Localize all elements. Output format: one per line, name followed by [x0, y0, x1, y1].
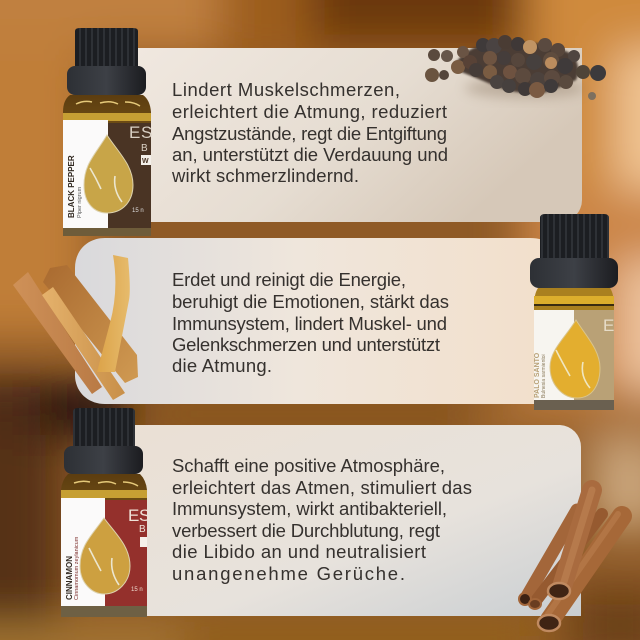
label drop — [80, 518, 130, 594]
stick ends — [519, 583, 570, 631]
label brand: E — [129, 123, 140, 142]
bottle: black pepper: S — [141, 123, 152, 142]
bottle collar — [530, 258, 618, 288]
panel: black pepper — [100, 48, 582, 222]
bottle cap — [540, 214, 609, 262]
text: black pepper benefits: erleichtert die Atmung, reduziert — [172, 101, 447, 122]
bottle: cinnamon — [61, 408, 150, 617]
label brand: E — [603, 316, 614, 335]
text: black pepper benefits: Lindert Muskelschmerzen, — [172, 79, 400, 100]
bottle: black pepper — [63, 28, 152, 236]
bottle: black pepper: Piper nigrum — [77, 186, 83, 218]
bottle: cinnamon: 15 n — [131, 587, 143, 593]
label drop — [550, 320, 600, 398]
bottle cap — [75, 28, 138, 70]
bottle: black pepper: B — [141, 143, 148, 154]
cinnamon stick — [561, 490, 592, 590]
bottle label — [61, 498, 105, 606]
text: black pepper benefits — [171, 79, 448, 186]
wood stick — [13, 272, 102, 394]
text: palo santo benefits: die Atmung. — [172, 355, 272, 376]
bottle: cinnamon: S — [139, 506, 150, 525]
text: cinnamon benefits: die Libido an und neutralisiert — [172, 541, 426, 562]
text: palo santo benefits: beruhigt die Emotionen, stärkt das — [172, 291, 449, 312]
bottle cap — [73, 408, 135, 450]
bottle label — [63, 120, 108, 228]
cinnamon stick — [526, 510, 577, 598]
text: palo santo benefits — [172, 269, 449, 376]
text: cinnamon benefits: Schafft eine positive Atmosphäre, — [172, 455, 445, 476]
icon: cinnamon sticks — [519, 490, 622, 631]
bottle: cinnamon: B — [139, 524, 146, 535]
text: cinnamon benefits: verbessert die Durchblutung, regt — [172, 520, 440, 541]
text: black pepper benefits: Angstzustände, regt die Entgiftung — [172, 123, 447, 144]
icon: black peppercorns — [425, 35, 606, 100]
bottle: black pepper: W — [142, 158, 149, 165]
wood stick — [97, 255, 130, 372]
label brand: E — [128, 506, 139, 525]
panel: palo santo — [75, 238, 566, 404]
panel background: black pepper — [100, 48, 582, 222]
text: cinnamon benefits — [172, 455, 472, 584]
label drop — [84, 135, 133, 213]
label name: CINNAMON — [65, 556, 74, 600]
cinnamon stick — [550, 516, 622, 620]
cinnamon stick — [535, 514, 602, 602]
text: cinnamon benefits: unangenehme Gerüche. — [172, 563, 405, 584]
text: black pepper benefits: an, unterstützt die Verdauung und — [172, 144, 448, 165]
bottle glass — [534, 288, 614, 410]
text: palo santo benefits: Erdet und reinigt die Energie, — [172, 269, 406, 290]
bottle: palo santo: Bulnesia sarmientoi — [541, 354, 547, 398]
text: cinnamon benefits: Immunsystem, wirkt antibakteriell, — [172, 498, 447, 519]
label name: PALO SANTO — [534, 352, 541, 398]
panel: cinnamon — [100, 425, 581, 616]
bottle collar — [67, 66, 146, 95]
bottle collar — [64, 446, 143, 474]
label name: BLACK PEPPER — [67, 155, 76, 218]
text: palo santo benefits: Gelenkschmerzen und unterstützt — [172, 334, 440, 355]
bottle label — [534, 310, 574, 400]
bottle: palo santo — [530, 214, 618, 410]
text: palo santo benefits: Immunsystem, lindert Muskel- und — [172, 313, 447, 334]
text: cinnamon benefits: erleichtert das Atmen, stimuliert das — [172, 477, 472, 498]
bottle glass — [63, 95, 151, 236]
panel background: cinnamon — [100, 425, 581, 616]
bottle: cinnamon: Cinnamomum zeylanicum — [74, 536, 80, 600]
bottle glass — [61, 474, 147, 617]
panel background: palo santo — [75, 238, 566, 404]
wood stick — [42, 287, 125, 400]
icon: palo santo sticks — [13, 255, 138, 400]
text: black pepper benefits: wirkt schmerzlindernd. — [171, 165, 359, 186]
bottle: black pepper: 15 n — [132, 208, 144, 214]
wood stick — [43, 265, 138, 383]
